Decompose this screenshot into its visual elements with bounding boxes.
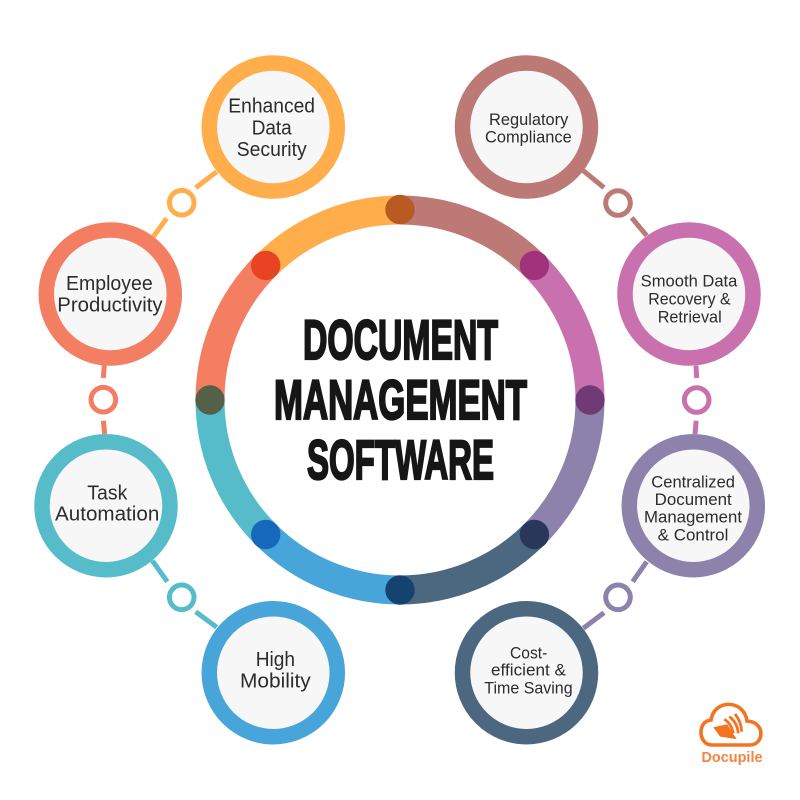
- node: smooth data recovery and retrieval: Recovery &: [648, 290, 731, 308]
- node: smooth data recovery and retrieval: Smooth Data: [641, 273, 738, 291]
- node: regulatory compliance: Compliance: [485, 128, 572, 146]
- connector: centralized management to cost efficient: [583, 562, 647, 628]
- central segmented ring: [210, 210, 590, 590]
- node: task automation: [42, 442, 170, 570]
- node: task automation: Automation: [55, 504, 159, 526]
- title: DOCUMENT: [303, 308, 498, 371]
- node: centralized document management and control: Centralized: [651, 473, 735, 491]
- node: centralized document management and control: & Control: [658, 527, 728, 545]
- title: SOFTWARE: [307, 428, 494, 491]
- node: regulatory compliance: [462, 63, 590, 191]
- node: enhanced data security: Security: [237, 139, 307, 161]
- node: high mobility: High: [256, 649, 295, 671]
- node: high mobility: Mobility: [240, 670, 311, 692]
- node: cost efficient and time saving: [462, 609, 590, 737]
- logo: docupile: [701, 704, 762, 766]
- node: employee productivity: [46, 230, 174, 358]
- node: centralized document management and control: Document: [655, 491, 732, 509]
- node: smooth data recovery and retrieval: Retrieval: [658, 308, 722, 326]
- node: task automation: Task: [87, 482, 128, 504]
- node: high mobility: [209, 609, 337, 737]
- node: enhanced data security: Data: [252, 117, 293, 139]
- connector: regulatory compliance to smooth data recovery: [583, 171, 647, 236]
- connector: employee productivity to task automation: [91, 365, 116, 434]
- node: employee productivity: Productivity: [57, 295, 163, 317]
- connector: task automation to high mobility: [152, 561, 217, 627]
- node: cost efficient and time saving: Cost-: [510, 644, 547, 662]
- title: [274, 308, 527, 491]
- node: enhanced data security: Enhanced: [228, 96, 315, 118]
- node: regulatory compliance: Regulatory: [489, 111, 569, 129]
- connector: smooth data recovery to centralized management: [684, 366, 709, 434]
- node: employee productivity: Employee: [66, 273, 153, 295]
- icon: cloud with document: [701, 704, 761, 745]
- node: centralized document management and control: Management: [644, 509, 742, 527]
- connector: enhanced security to employee productivity: [153, 172, 217, 237]
- node: centralized document management and control: [629, 442, 757, 570]
- node: cost efficient and time saving: efficient &: [491, 662, 566, 680]
- title: MANAGEMENT: [274, 368, 527, 431]
- node: enhanced data security: [209, 63, 337, 191]
- node: cost efficient and time saving: Time Saving: [484, 680, 573, 698]
- logo: docupile: Docupile: [702, 749, 762, 766]
- node: smooth data recovery and retrieval: [625, 230, 753, 358]
- ring junction dots: [195, 195, 605, 605]
